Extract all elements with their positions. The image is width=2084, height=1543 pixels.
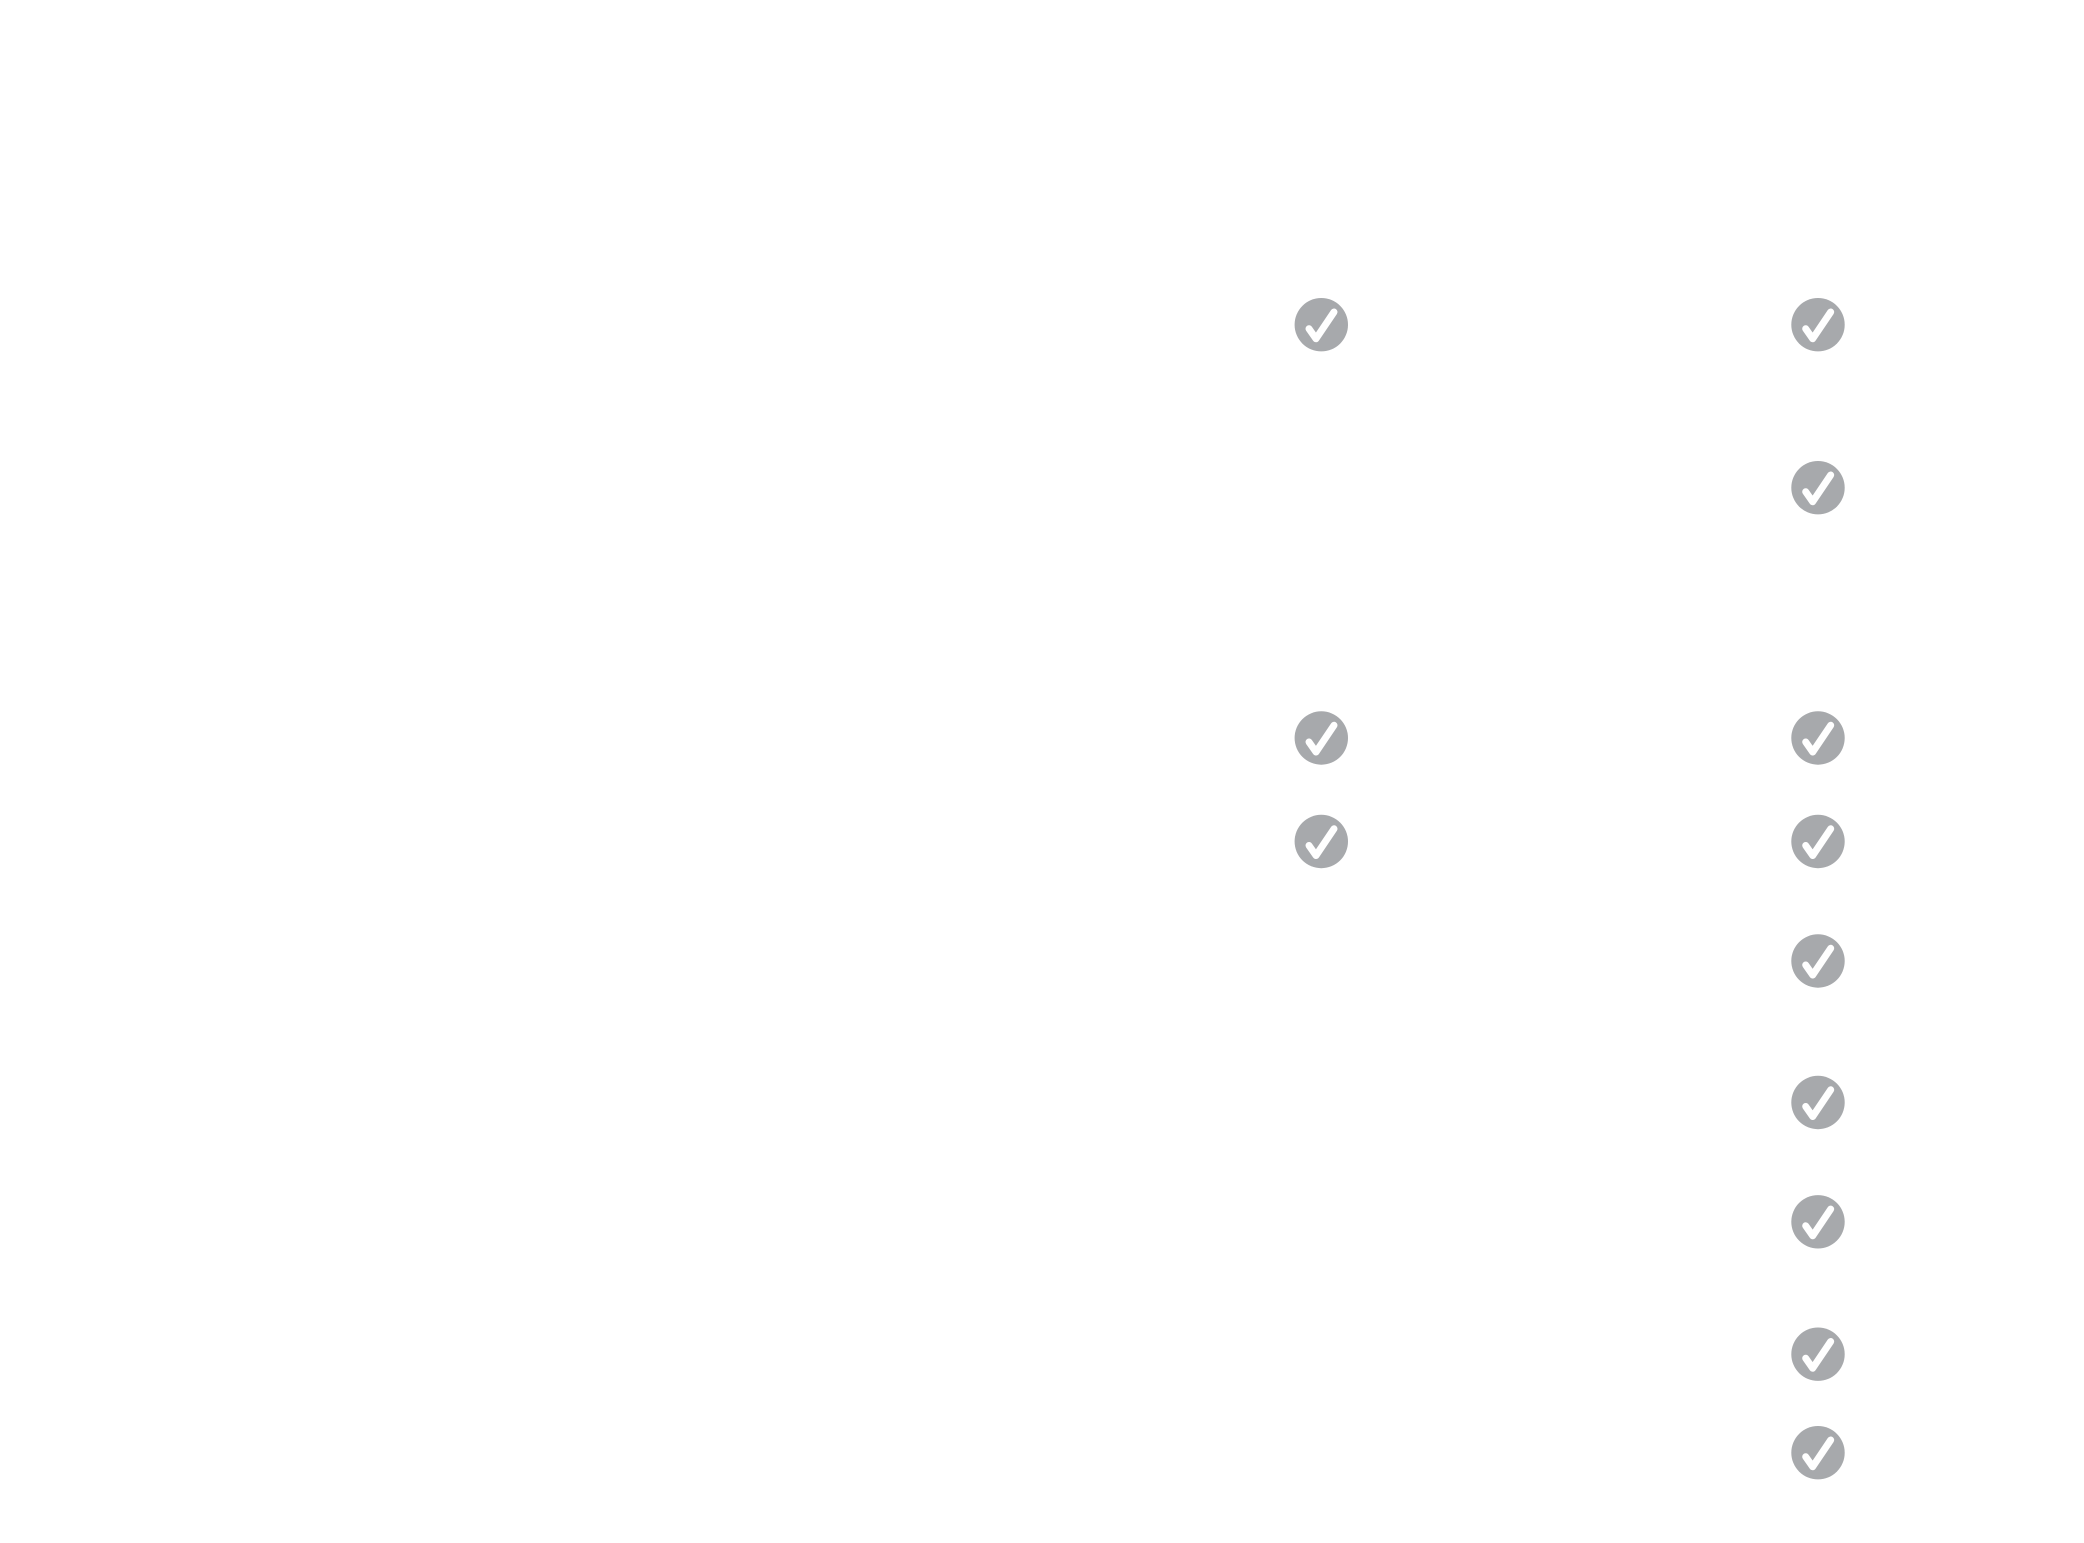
icon: right column check 1 <box>1791 298 1845 351</box>
icon: right column check 4 <box>1791 815 1845 868</box>
icon: left column check 1 <box>1295 298 1348 351</box>
icon: right column check 3 <box>1791 711 1845 765</box>
icon: left column check 2 <box>1295 711 1348 765</box>
icon: right column check 5 <box>1791 934 1845 988</box>
icon: right column check 2 <box>1791 461 1845 514</box>
icon: left column check 3 <box>1295 815 1348 868</box>
icon: right column check 8 <box>1791 1328 1845 1381</box>
icon: right column check 9 <box>1791 1426 1845 1479</box>
icon: right column check 6 <box>1791 1076 1845 1129</box>
icon: right column check 7 <box>1791 1195 1845 1248</box>
